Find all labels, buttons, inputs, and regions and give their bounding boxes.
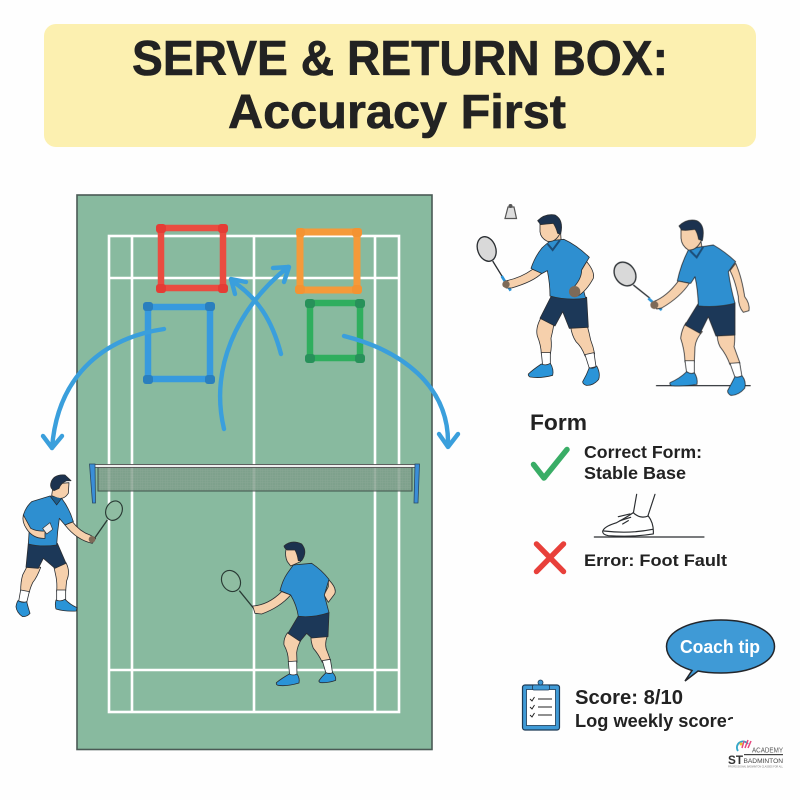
heading: form: Form: [530, 410, 587, 435]
callout: coach tip: Coach tip: [680, 637, 760, 657]
icon: green check: [534, 450, 567, 478]
arrow: serve to red box: [231, 279, 281, 354]
arrow: green box return to right: [344, 336, 458, 447]
icon: shuttlecock: [505, 204, 516, 218]
text: correct form: Stable Base: [584, 463, 686, 483]
text: correct form: [584, 442, 702, 483]
logo: ST badminton academy: PROFESSIONAL BADMINTON CLASSES FOR ALL: [728, 766, 784, 768]
net: [90, 464, 420, 503]
logo: ST badminton academy: [728, 740, 784, 768]
logo: ST badminton academy: ACADEMY: [752, 748, 783, 754]
logo: ST badminton academy: ST: [728, 753, 744, 767]
text: correct form: Correct Form:: [584, 442, 702, 462]
text: foot fault error: Error: Foot Fault: [584, 551, 727, 570]
panel: badminton court: [77, 195, 432, 750]
player: correct serve stance two on ground line: [610, 220, 751, 395]
title banner: Accuracy First: [228, 86, 566, 139]
icon: clipboard: [522, 680, 560, 730]
title banner: [44, 24, 756, 147]
player: correct serve stance one: [474, 215, 599, 385]
target box: blue: [143, 302, 215, 384]
callout: coach tip: [666, 620, 774, 681]
text: score and weekly log: Score: 8/10: [575, 687, 683, 709]
arrow: serve to orange box: [220, 267, 289, 429]
player: left of court with racket: [16, 475, 125, 617]
arrow: blue box return to left: [43, 329, 164, 448]
title banner: SERVE & RETURN BOX:: [132, 32, 668, 86]
icon: red cross: [536, 544, 564, 572]
text: score and weekly log: Log weekly scores: [575, 711, 737, 731]
player: on court returning: [218, 542, 336, 686]
logo: ST badminton academy: BADMINTON: [744, 758, 783, 765]
target box: red: [156, 224, 228, 293]
target box: green: [305, 299, 365, 363]
target box: orange: [295, 228, 362, 294]
text: score and weekly log: [575, 687, 745, 731]
icon: foot on ground line: [594, 494, 704, 537]
